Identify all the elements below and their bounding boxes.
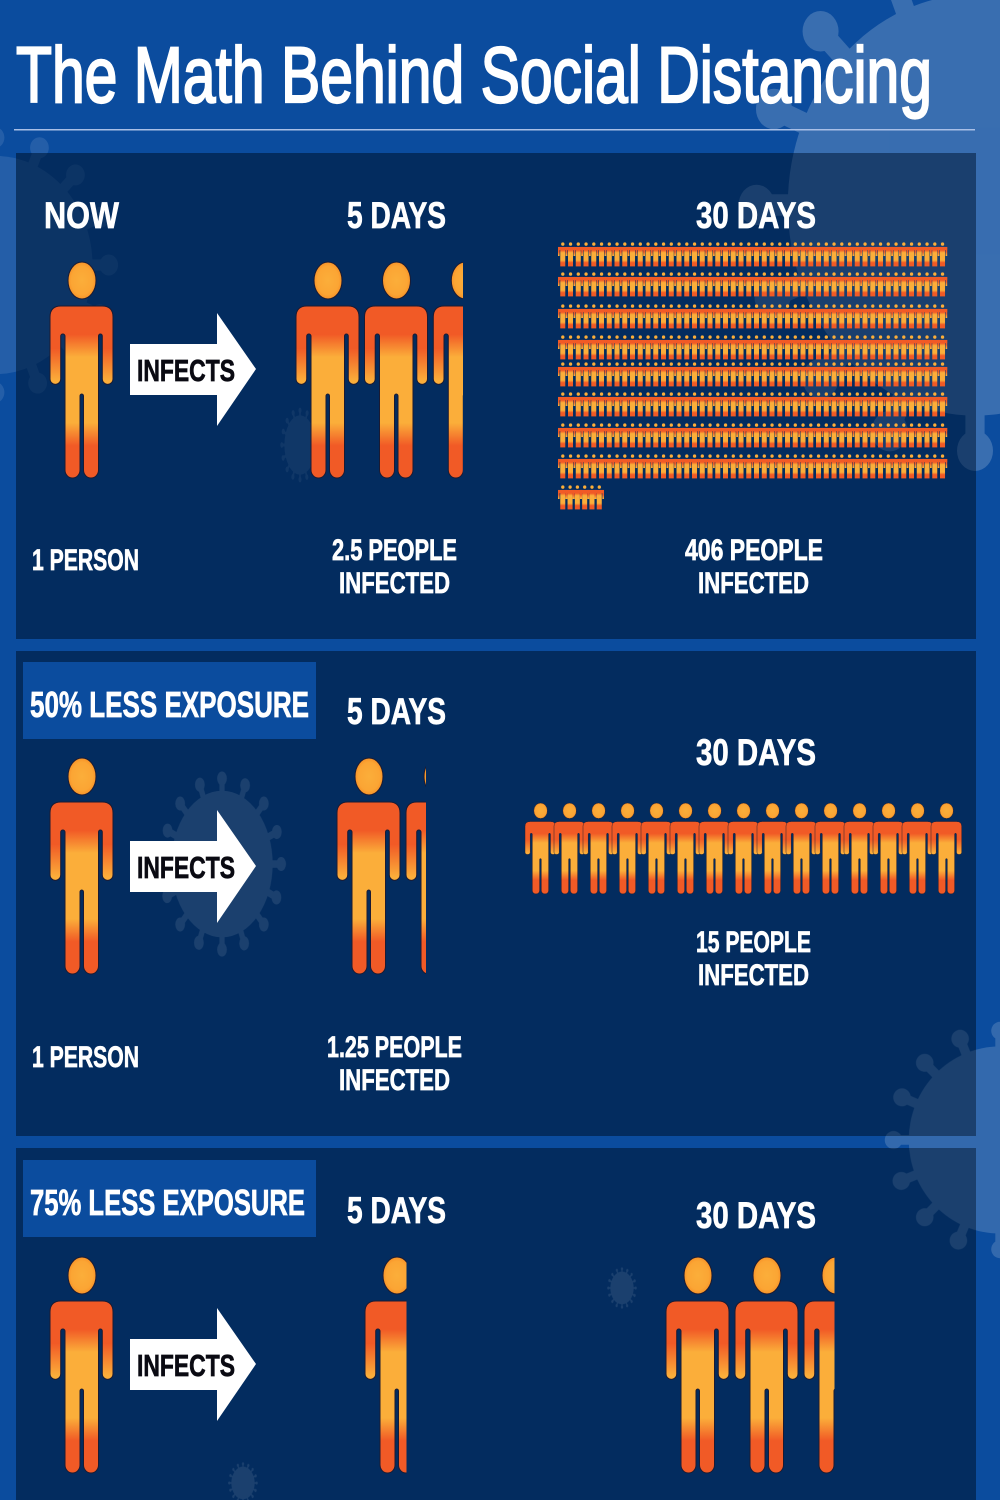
panel virus shapes — [162, 772, 976, 1136]
icon: one person — [50, 1257, 113, 1473]
label: 15 people infected — [696, 926, 811, 992]
icons: 406 people — [558, 242, 947, 509]
icon: one person — [50, 262, 113, 478]
icons: 2.5 people at 30 days — [666, 1256, 834, 1474]
heading: 30 days: 30 DAYS — [696, 195, 816, 236]
title rule — [14, 129, 975, 130]
icons: 1.25 people — [336, 758, 426, 974]
label: 2.5 people infected: INFECTED — [339, 567, 450, 600]
panel: 75% less exposure — [16, 1148, 976, 1500]
heading: 30 days: 30 DAYS — [696, 1195, 816, 1236]
label: 2.5 people infected: 2.5 PEOPLE — [332, 534, 457, 567]
heading: now: NOW — [44, 195, 119, 236]
label: 1.25 people infected: INFECTED — [339, 1064, 450, 1097]
heading: 5 days: 5 DAYS — [347, 195, 446, 236]
background virus top right — [739, 0, 1000, 471]
icons: 15 people — [525, 803, 962, 894]
panel virus left — [16, 153, 118, 394]
background virus left — [0, 127, 118, 403]
label: 1 person: 1 PERSON — [32, 1041, 139, 1074]
label: 406 people infected: 406 PEOPLE — [685, 534, 823, 567]
heading: 30 days: 30 DAYS — [696, 732, 816, 773]
background virus bottom right — [885, 1022, 1000, 1258]
arrow: infects — [130, 810, 256, 923]
panel background — [16, 153, 976, 639]
label: 1 person: 1 PERSON — [32, 544, 139, 577]
label: 2.5 people infected — [332, 534, 457, 600]
label: 406 people infected: INFECTED — [698, 567, 809, 600]
heading box: 75% less exposure: 75% LESS EXPOSURE — [30, 1182, 305, 1223]
icon: one person — [50, 758, 113, 974]
label: 15 people infected: INFECTED — [698, 959, 809, 992]
icons: 2.5 people — [296, 262, 463, 478]
heading box: 50% less exposure: 50% LESS EXPOSURE — [30, 684, 309, 725]
icons: partial person — [364, 1256, 406, 1474]
panel virus small — [280, 408, 320, 482]
label: 406 people infected — [685, 534, 823, 600]
heading box: 50% less exposure — [23, 662, 316, 739]
label: 15 people infected: 15 PEOPLE — [696, 926, 811, 959]
panel: now — [16, 153, 976, 639]
panel background — [16, 651, 976, 1136]
heading box: 75% less exposure — [23, 1160, 316, 1237]
heading: 5 days: 5 DAYS — [347, 691, 446, 732]
label: 1.25 people infected — [327, 1031, 462, 1097]
arrow: infects — [130, 1308, 256, 1421]
panel virus top right — [739, 153, 976, 471]
panel virus shapes — [228, 1148, 976, 1500]
heading: 5 days: 5 DAYS — [347, 1190, 446, 1231]
arrow: infects — [130, 313, 256, 426]
panel background — [16, 1148, 976, 1500]
label: 1.25 people infected: 1.25 PEOPLE — [327, 1031, 462, 1064]
panel: 50% less exposure — [16, 651, 976, 1136]
